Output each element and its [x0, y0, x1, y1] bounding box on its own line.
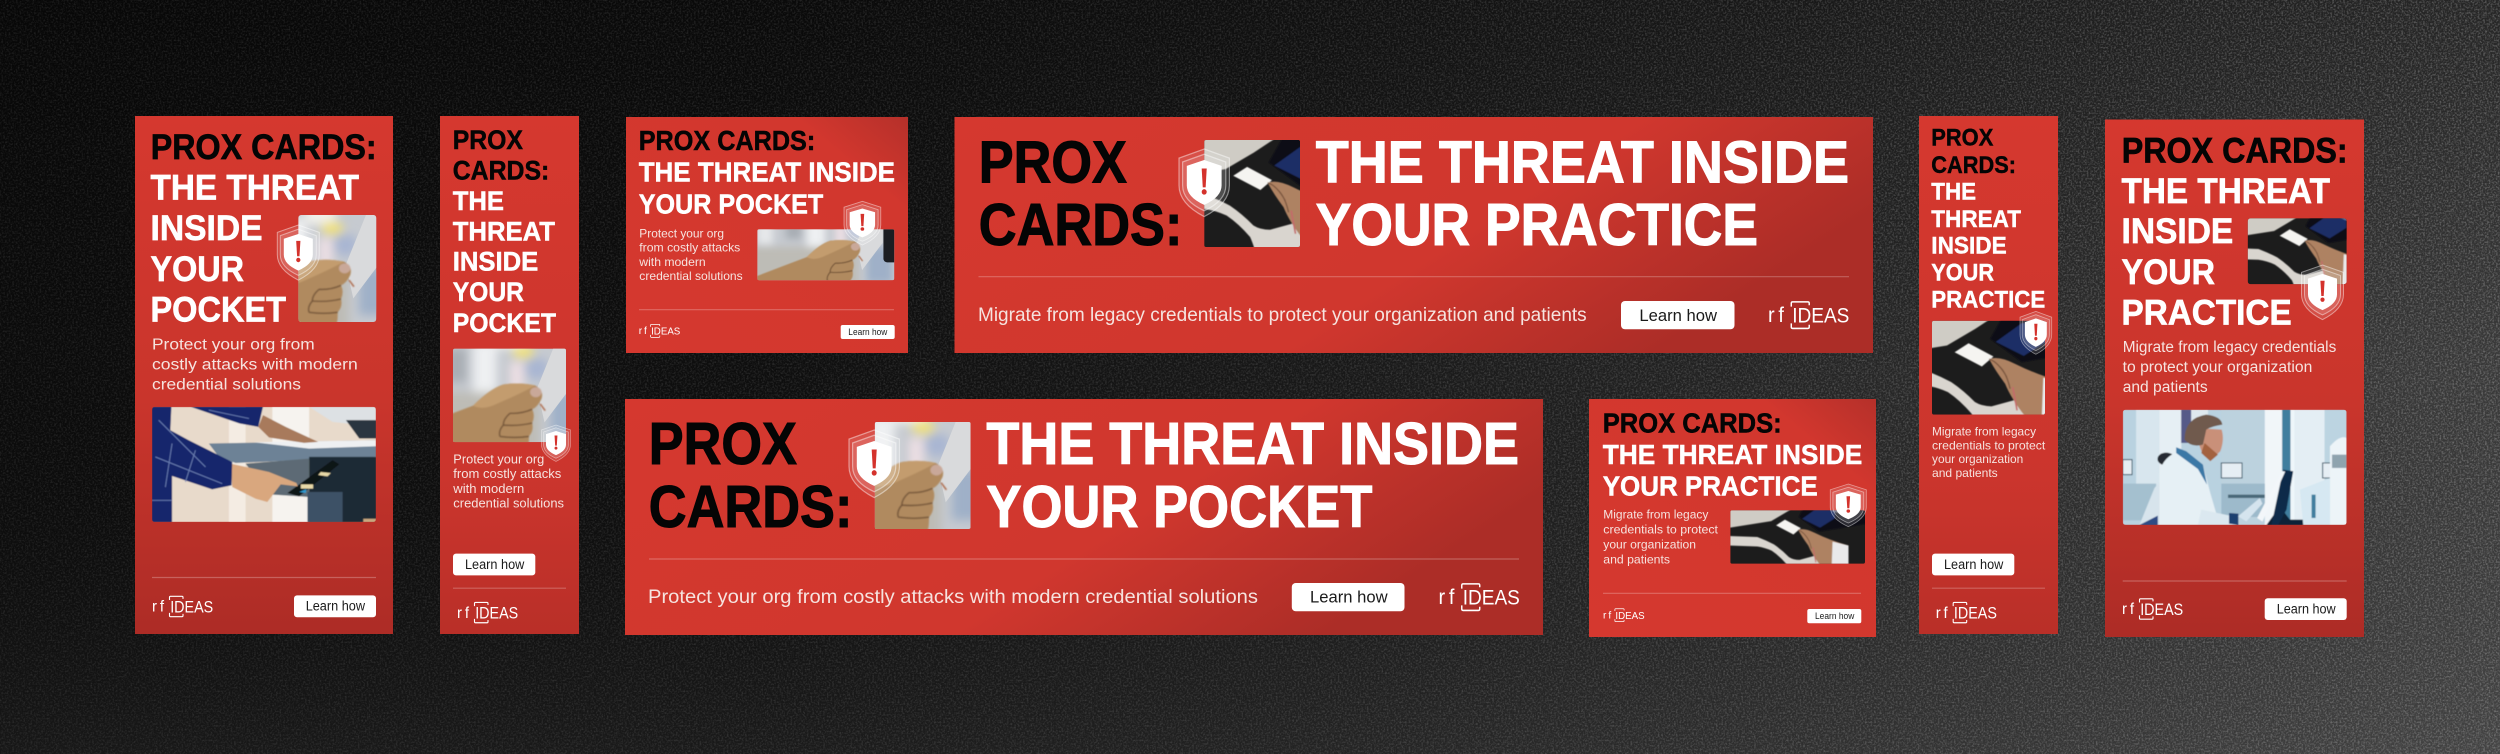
photo: hand tapping card on reader — [1730, 510, 1865, 564]
heading: THE — [1931, 179, 1976, 206]
body text: Protect your org from — [152, 336, 315, 353]
heading: PROX CARDS: — [639, 125, 815, 156]
heading: INSIDE — [453, 247, 538, 277]
heading: PROX CARDS: — [151, 128, 377, 167]
body text — [152, 336, 358, 393]
body text: Migrate from legacy — [1603, 507, 1709, 521]
photo: person using printer — [152, 407, 376, 522]
heading: THE THREAT INSIDE — [1603, 439, 1862, 470]
heading: YOUR — [453, 277, 524, 307]
heading: YOUR PRACTICE — [1603, 470, 1818, 501]
logo: rf IDEAS: rf — [1438, 586, 1455, 609]
logo: rf IDEAS: IDEAS — [170, 598, 213, 616]
heading: INSIDE — [2122, 212, 2233, 251]
banner 5: wide, your pocket — [625, 388, 1543, 635]
heading: prox cards: PROX — [649, 411, 797, 477]
logo: rf IDEAS: IDEAS — [1792, 304, 1849, 328]
button: learn how — [1807, 609, 1861, 623]
button: learn how — [1292, 583, 1404, 611]
button: learn how: Learn how — [306, 599, 365, 614]
heading: THREAT — [1931, 206, 2021, 233]
heading: POCKET — [453, 308, 556, 338]
logo: rf IDEAS: IDEAS — [2140, 600, 2183, 619]
heading: YOUR — [150, 250, 244, 289]
banner 8: tall, your practice with lab photo — [2105, 120, 2364, 637]
body text: credential solutions — [453, 496, 564, 510]
heading: threat inside your pocket — [986, 411, 1519, 540]
heading — [1603, 408, 1862, 501]
heading — [1931, 125, 2045, 314]
body text: to protect your organization — [2123, 359, 2312, 376]
logo: rf IDEAS — [457, 602, 518, 623]
logo: rf IDEAS — [1768, 302, 1849, 328]
icon: shield alert — [1830, 484, 1866, 527]
logo: rf IDEAS — [1936, 602, 1997, 623]
heading: PROX CARDS: — [1603, 408, 1782, 439]
body text: credentials to protect — [1932, 439, 2046, 452]
button: learn how: Learn how — [1944, 557, 2004, 572]
heading: POCKET — [150, 290, 286, 329]
body text: and patients — [1932, 467, 1998, 480]
logo: rf IDEAS: rf — [639, 326, 647, 337]
icon: shield alert — [1179, 149, 1229, 217]
logo: rf IDEAS: rf — [1603, 610, 1611, 621]
button: learn how: Learn how — [1639, 306, 1718, 325]
heading — [2122, 132, 2348, 332]
banner 6: medium, your practice — [1589, 399, 1889, 637]
logo: rf IDEAS: IDEAS — [475, 604, 518, 623]
button: learn how: Learn how — [848, 327, 888, 337]
body text — [452, 453, 564, 510]
body text: Protect your org — [453, 453, 544, 467]
photo: hand tapping card on reader — [2248, 218, 2347, 284]
logo: rf IDEAS: rf — [2122, 601, 2135, 618]
heading: threat inside your practice: THE THREAT INSIDE — [1316, 129, 1849, 195]
button: learn how — [841, 325, 895, 339]
body text: with modern — [638, 256, 706, 269]
heading — [453, 125, 556, 338]
button: learn how — [1621, 301, 1734, 329]
heading: THE THREAT — [2122, 172, 2330, 211]
body text: Protect your org — [639, 228, 724, 241]
button: learn how: Learn how — [2277, 602, 2336, 617]
heading: CARDS: — [1931, 152, 2016, 179]
button: learn how: Learn how — [1815, 611, 1855, 621]
body text: costly attacks with modern — [152, 356, 358, 373]
logo: rf IDEAS — [1603, 609, 1645, 622]
body text: credentials to protect — [1603, 522, 1719, 536]
heading — [639, 125, 895, 219]
heading: PROX CARDS: — [2122, 132, 2348, 170]
body text: Migrate from legacy — [1932, 426, 2036, 439]
body text — [638, 228, 743, 283]
body text — [2123, 339, 2337, 396]
logo: rf IDEAS: rf — [152, 598, 165, 616]
body text: from costly attacks — [639, 242, 740, 255]
banner 1: tall, your pocket with printer photo — [135, 116, 393, 634]
banner 4: wide, your practice — [954, 111, 1873, 353]
icon: shield alert — [277, 225, 319, 280]
logo: rf IDEAS: IDEAS — [1954, 604, 1997, 623]
icon: shield alert — [2302, 265, 2344, 320]
logo: rf IDEAS: IDEAS — [651, 326, 680, 338]
banner 7: narrow, your practice — [1919, 116, 2058, 634]
body text: your organization — [1932, 453, 2023, 466]
logo: rf IDEAS: rf — [1768, 304, 1784, 327]
logo: rf IDEAS — [152, 596, 213, 617]
icon: shield alert — [844, 201, 881, 245]
button: learn how — [1932, 554, 2014, 575]
heading: YOUR — [2122, 253, 2215, 292]
body text: Migrate from legacy credentials — [2123, 339, 2337, 356]
button: learn how: Learn how — [1310, 588, 1388, 607]
heading: YOUR — [1931, 259, 1994, 286]
button: learn how — [2265, 598, 2347, 620]
body text: and patients — [2123, 379, 2208, 396]
photo: lab scientist at touchscreen — [2123, 410, 2347, 525]
photo: hand holding prox card — [453, 348, 566, 442]
heading: INSIDE — [150, 209, 262, 248]
heading: PRACTICE — [1931, 286, 2045, 314]
heading: INSIDE — [1931, 233, 2007, 260]
heading: YOUR POCKET — [639, 188, 823, 219]
body text — [1932, 426, 2046, 480]
heading: prox cards: PROX — [979, 129, 1127, 195]
heading: threat inside your practice: YOUR PRACTICE — [1316, 192, 1758, 258]
logo: rf IDEAS — [2122, 599, 2183, 619]
photo: hand tapping card on reader — [1204, 140, 1300, 247]
heading: THREAT — [453, 216, 555, 246]
heading: THE THREAT INSIDE — [639, 157, 895, 188]
heading: threat inside your pocket: THE THREAT INSIDE — [986, 411, 1519, 477]
heading: prox cards — [649, 411, 852, 540]
button: learn how: Learn how — [465, 557, 525, 572]
heading: threat inside your pocket: YOUR POCKET — [986, 474, 1372, 540]
heading: THE THREAT — [150, 168, 359, 207]
body text: from costly attacks — [453, 467, 561, 481]
heading: prox cards: CARDS: — [649, 474, 852, 540]
icon: shield alert — [849, 430, 899, 498]
logo: rf IDEAS — [639, 324, 680, 338]
heading: THE — [453, 186, 504, 216]
logo: rf IDEAS: IDEAS — [1615, 610, 1645, 622]
logo: rf IDEAS: rf — [1936, 604, 1948, 622]
heading: PROX — [453, 125, 523, 155]
icon: shield alert — [2020, 311, 2052, 354]
body text: credential solutions — [152, 376, 301, 393]
body text — [1603, 507, 1719, 567]
logo: rf IDEAS: rf — [457, 604, 470, 622]
photo: hand holding prox card — [757, 229, 894, 280]
heading: CARDS: — [453, 155, 549, 185]
body text: with modern — [452, 482, 524, 496]
banner 3: medium, your pocket — [626, 117, 908, 353]
body text: and patients — [1603, 553, 1670, 567]
heading: prox cards — [979, 129, 1182, 258]
body text: credential solutions — [639, 270, 743, 283]
photo: hand holding prox card — [298, 215, 376, 322]
photo: hand holding prox card — [874, 422, 971, 529]
heading — [150, 128, 377, 329]
logo: rf IDEAS: IDEAS — [1463, 586, 1520, 610]
photo: hand tapping card on reader — [1932, 320, 2045, 415]
banner 2: narrow, your pocket — [440, 116, 579, 634]
heading: PRACTICE — [2122, 293, 2292, 332]
body text: your organization — [1603, 537, 1696, 551]
button: learn how — [294, 595, 376, 617]
heading: threat inside your practice — [1316, 129, 1849, 258]
button: learn how — [453, 554, 535, 575]
logo: rf IDEAS — [1438, 584, 1520, 610]
icon: shield alert — [542, 425, 570, 461]
heading: prox cards: CARDS: — [979, 192, 1182, 258]
heading: PROX — [1931, 125, 1993, 152]
body text: Protect your org from costly attacks with modern credential solutions — [648, 586, 1258, 608]
body text: Migrate from legacy credentials to protect your organization and patients — [978, 304, 1587, 326]
